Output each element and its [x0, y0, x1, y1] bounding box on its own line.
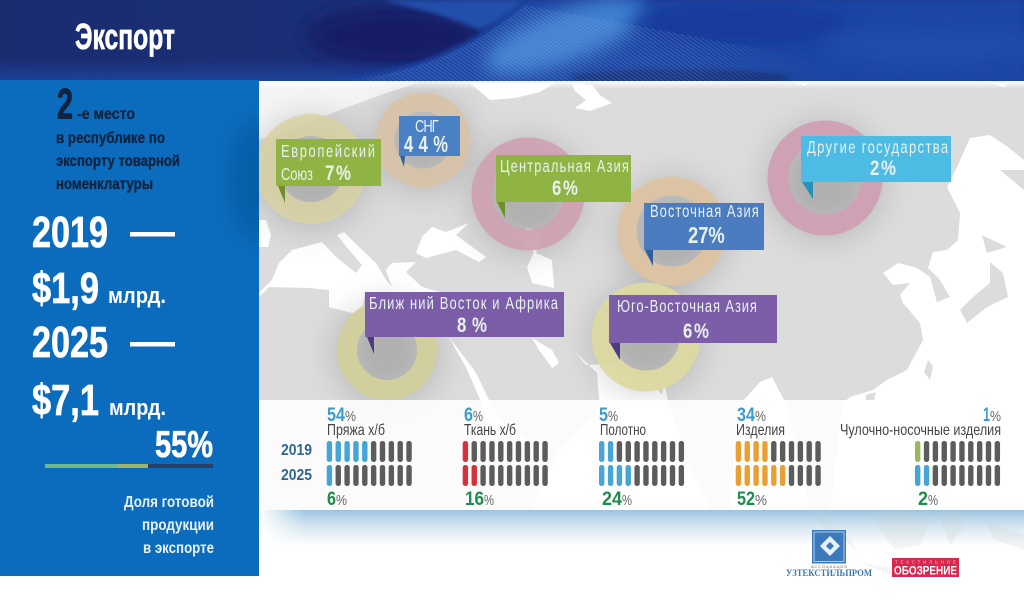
ranking text: 2: [57, 80, 73, 128]
logo: Узтекстильпром: [786, 530, 872, 579]
logo: Текстильное обозрение: ТЕКСТИЛЬНОЕ: [895, 560, 956, 564]
callout: Другие государства: Другие государства: [807, 138, 948, 158]
product: Полотно: [599, 405, 684, 510]
ring: Другие государства: [778, 131, 872, 225]
lower map fade and shadow: [259, 510, 1024, 577]
product: Ткань х/б: 6: [464, 405, 473, 426]
callout: Восточная Азия: 27%: [688, 223, 725, 249]
logo: Текстильное обозрение: [892, 558, 959, 578]
ranking text: [56, 80, 180, 193]
product: Чулочно-носочные изделия: 1: [983, 405, 990, 426]
product: Изделия: Изделия: [736, 422, 785, 439]
header banner: [0, 0, 1024, 90]
product: Изделия: %: [755, 408, 766, 425]
finished goods share: [45, 424, 214, 557]
callout: Центральная Азия: Центральная Азия: [500, 157, 629, 177]
product: Пряжа х/б: 6: [327, 489, 336, 510]
product: Пряжа х/б: 54: [327, 405, 345, 426]
figure 2019: млрд.: [108, 283, 166, 308]
product: Изделия: %: [755, 492, 767, 509]
callout: Европейский Союз: 7%: [325, 162, 351, 186]
product: Ткань х/б: %: [484, 492, 494, 509]
callout: Центральная Азия: 6%: [552, 177, 578, 201]
figure 2025: $7,1: [32, 376, 99, 425]
ring: Европейский Союз: [267, 125, 355, 213]
callout: Другие государства: [801, 136, 951, 199]
callout: Юго-Восточная Азия: Юго-Восточная Азия: [617, 297, 757, 317]
product: Полотно: Полотно: [600, 422, 646, 439]
ring: Юго-Восточная Азия: [602, 293, 690, 381]
product: Пряжа х/б: [327, 405, 412, 510]
logo: Узтекстильпром: АССОЦИАЦИЯ: [811, 564, 847, 569]
ring: Восточная Азия: [627, 186, 717, 276]
finished goods share: в экспорте: [143, 540, 214, 557]
figure 2025: млрд.: [109, 395, 166, 420]
world map background: [259, 81, 1024, 510]
year labels: 2019: [281, 442, 312, 459]
product: Полотно: %: [622, 492, 632, 509]
ranking text: номенклатуры: [56, 176, 153, 193]
callout: СНГ: 44%: [404, 132, 448, 158]
product: Полотно: 5: [599, 405, 608, 426]
product: Чулочно-носочные изделия: %: [928, 492, 938, 509]
ranking text: экспорту товарной: [56, 153, 180, 170]
ring: Ближний Восток и Африка: [347, 310, 427, 390]
figure 2019: 2019: [32, 208, 108, 257]
figure 2019: $1,9: [32, 264, 99, 313]
product: Пряжа х/б: %: [336, 492, 347, 509]
product: Ткань х/б: %: [473, 408, 483, 425]
product: Пряжа х/б: Пряжа х/б: [327, 422, 385, 439]
callout: Европейский Союз: Союз: [281, 165, 313, 185]
panel: product strip: [259, 400, 1024, 510]
product: Полотно: %: [608, 408, 618, 425]
callout: Другие государства: 2%: [870, 157, 896, 181]
callout: СНГ: [399, 116, 460, 167]
logo: Узтекстильпром: УЗТЕКСТИЛЬПРОМ: [786, 569, 872, 579]
product: Чулочно-носочные изделия: 2: [918, 489, 928, 510]
callout: Европейский Союз: [276, 139, 381, 203]
product: Изделия: [736, 405, 821, 510]
ring: СНГ: [385, 102, 461, 178]
callout: Восточная Азия: Восточная Азия: [650, 202, 759, 222]
product: Ткань х/б: Ткань х/б: [464, 422, 516, 439]
figure 2025: [32, 318, 175, 425]
callout: Юго-Восточная Азия: 6%: [683, 320, 709, 344]
callout: Ближний Восток и Африка: 8 %: [457, 314, 487, 338]
product: Чулочно-носочные изделия: %: [990, 408, 1001, 425]
product: Ткань х/б: [463, 405, 548, 510]
callout: СНГ: СНГ: [415, 117, 439, 137]
ranking text: -е место: [77, 106, 135, 123]
product: Чулочно-носочные изделия: [840, 405, 1001, 510]
callout: Восточная Азия: [644, 202, 764, 266]
title: Экспорт: [75, 16, 175, 57]
year labels: 2025: [281, 467, 312, 484]
callout: Ближний Восток и Африка: [365, 292, 564, 354]
callout: Юго-Восточная Азия: [609, 295, 777, 360]
product: Ткань х/б: 16: [465, 489, 484, 510]
logo: Текстильное обозрение: ОБОЗРЕНИЕ: [894, 564, 957, 578]
ranking text: в республике по: [56, 130, 165, 147]
callout: Европейский Союз: Европейский: [281, 142, 375, 162]
finished goods share: продукции: [142, 517, 214, 534]
product: Изделия: 52: [737, 489, 755, 510]
panel: left summary: [0, 80, 259, 576]
product: Пряжа х/б: %: [345, 408, 356, 425]
ring: Центральная Азия: [482, 148, 574, 240]
callout: Ближний Восток и Африка: Ближ ний Восток и Африка: [369, 294, 558, 314]
product: Изделия: 34: [737, 405, 755, 426]
product: Полотно: 24: [602, 489, 622, 510]
year labels: [281, 442, 312, 484]
figure 2019: [32, 208, 175, 313]
finished goods share: Доля готовой: [124, 494, 214, 511]
figure 2025: 2025: [32, 318, 108, 367]
callout: Центральная Азия: [496, 155, 631, 218]
ring halos: [257, 97, 880, 402]
finished goods share: 55%: [155, 424, 213, 465]
